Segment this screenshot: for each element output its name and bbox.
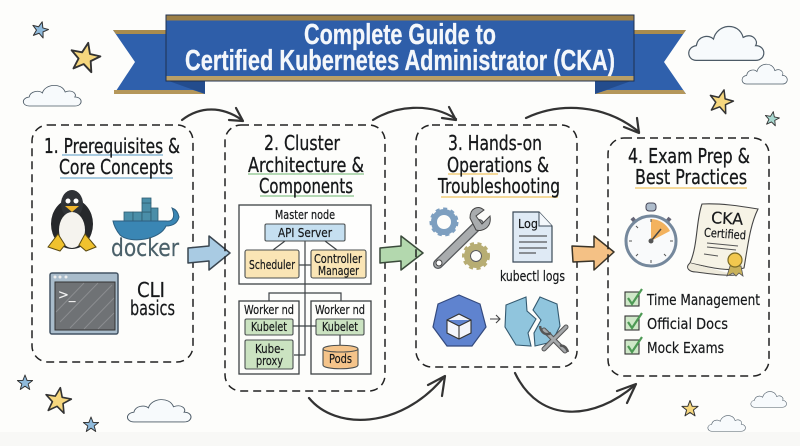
- heading: panel 4: Best Practices: [635, 165, 747, 189]
- check item: Time Management: Time Management: [646, 291, 760, 309]
- heading: panel 4: [628, 144, 750, 189]
- controller manager: [311, 250, 366, 278]
- text: CLI basics: CLI: [137, 278, 165, 302]
- worker node left: Worker nd: [244, 302, 294, 317]
- check item: Mock Exams: Mock Exams: [647, 339, 724, 357]
- controller manager: Controller: [314, 251, 363, 266]
- block arrow: orange: [572, 236, 614, 270]
- icon: Docker whale: [111, 198, 179, 262]
- icon: gears and wrench: [431, 208, 490, 268]
- heading: panel 3: 3. Hands-on: [448, 131, 542, 155]
- icon: log document: Log: [518, 217, 538, 231]
- panel: cluster architecture and components: [225, 125, 385, 391]
- curved arrow: panel 3 to panel 4 bottom: [515, 373, 636, 412]
- worker node right: Worker nd: [315, 302, 365, 317]
- worker node left: proxy: [256, 353, 283, 368]
- icon: broken pod with tools: [505, 297, 568, 352]
- icon: Linux penguin: [48, 190, 96, 251]
- controller manager: Manager: [318, 263, 360, 278]
- icon: CKA certificate: [688, 204, 758, 276]
- heading: panel 4: 4. Exam Prep &: [628, 144, 750, 168]
- heading: panel 3: [437, 131, 560, 198]
- icon: log document: [500, 212, 565, 285]
- check item: Official Docs: Official Docs: [647, 315, 728, 333]
- icon: terminal window: >_: [58, 288, 76, 303]
- master node box: Master node: [275, 207, 335, 222]
- icon: healthy pod: [433, 295, 486, 346]
- icon: CKA certificate: CKA: [711, 208, 744, 229]
- panel: exam prep and best practices: [608, 138, 769, 376]
- curved arrow: panel 2 up to panel 3: [309, 376, 445, 420]
- worker node left: [239, 301, 299, 374]
- heading: panel 1: 1. Prerequisites &: [44, 134, 180, 158]
- checklist: [625, 289, 760, 357]
- heading: panel 1: Core Concepts: [59, 155, 173, 179]
- diagram: cluster architecture: [239, 205, 371, 374]
- icon: stopwatch: [626, 203, 676, 266]
- heading: panel 2: 2. Cluster: [264, 131, 341, 155]
- curved arrow: panel 1 to panel 2: [182, 108, 243, 121]
- scheduler: Scheduler: [249, 257, 296, 272]
- worker node left: Kube-: [255, 341, 284, 356]
- caption: kubectl logs: kubectl logs: [500, 269, 565, 285]
- worker node right: [293, 301, 371, 374]
- panel: hands-on operations and troubleshooting: [416, 125, 577, 367]
- master node box: [239, 205, 371, 284]
- text: CLI basics: basics: [130, 296, 175, 320]
- heading: panel 2: Architecture &: [248, 153, 364, 177]
- title text: [185, 19, 615, 77]
- panel: prerequisites and core concepts: [32, 125, 193, 362]
- curved arrow: panel 3 to panel 4: [526, 108, 639, 133]
- API server: API Server: [278, 225, 333, 240]
- heading: panel 1: [44, 134, 180, 179]
- title banner: [113, 15, 686, 94]
- title text: Complete Guide to: [304, 19, 496, 51]
- title text: Certified Kubernetes Administrator (CKA): [185, 45, 615, 77]
- heading: panel 3: Operations &: [447, 153, 549, 177]
- icon: CKA certificate: Certified: [704, 226, 746, 242]
- heading: panel 2: Components: [259, 174, 353, 198]
- curved arrow: panel 2 to panel 3: [373, 107, 456, 120]
- worker node right: Pods: [329, 351, 352, 366]
- text: CLI basics: [130, 278, 175, 320]
- icon: terminal window: [50, 273, 118, 334]
- arrow: pod to broken pod: [490, 315, 500, 323]
- heading: panel 3: Troubleshooting: [437, 174, 560, 198]
- heading: panel 2: [248, 131, 364, 198]
- connector lines: [269, 241, 341, 355]
- block arrow: green: [380, 236, 423, 270]
- scheduler: [245, 250, 299, 278]
- worker node left: Kubelet: [251, 319, 287, 334]
- block arrow: blue: [188, 236, 230, 270]
- docker wordmark: docker: [111, 234, 179, 262]
- worker node right: Kubelet: [322, 319, 358, 334]
